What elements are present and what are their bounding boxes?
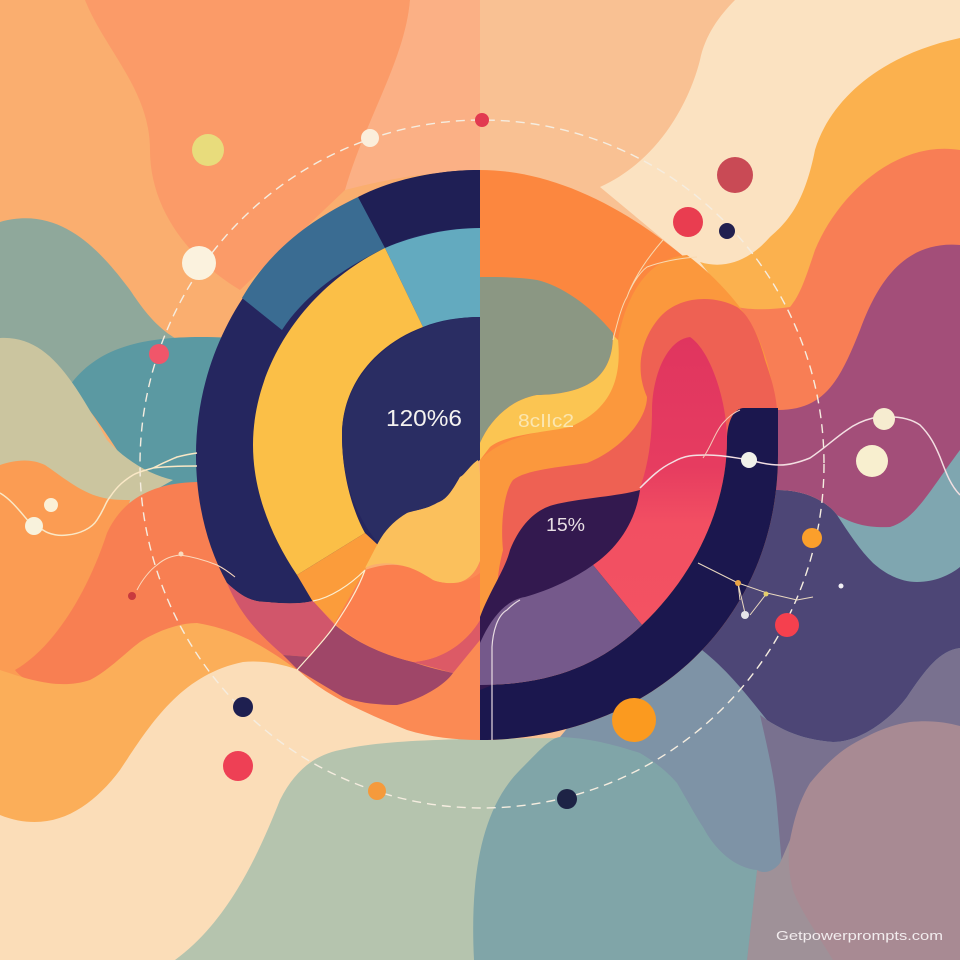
dot: left coral	[149, 344, 169, 364]
ring: coral swirl	[497, 299, 777, 620]
background: slate-blue right	[830, 440, 960, 640]
background: peach top centre	[345, 0, 480, 190]
connector: bottom line	[297, 570, 365, 670]
ring: dark navy arc	[480, 408, 778, 740]
label: small scale: 8cIIc2	[518, 411, 574, 431]
watermark: Getpowerprompts.com	[776, 928, 943, 943]
dot: bottom red	[223, 751, 253, 781]
label: 15%: 15%	[546, 515, 585, 535]
background: cream wave	[600, 0, 960, 300]
dot: navy lower left	[233, 697, 253, 717]
ring: lighter orange band	[480, 255, 778, 620]
label: 120%: 120%6	[386, 405, 462, 431]
dot: left cream pair 1	[44, 498, 58, 512]
ring: light blue segment	[385, 228, 480, 327]
dot: navy small	[719, 223, 735, 239]
connector: lower left line	[137, 555, 235, 590]
background: amber lower wave	[0, 623, 300, 825]
ring: lower yellow	[365, 460, 485, 583]
dot: amber node	[735, 580, 741, 586]
ring: crimson to rose segment	[593, 337, 727, 625]
background: coral wave	[737, 149, 960, 420]
connector: right branch	[703, 410, 740, 458]
background: amber wave	[700, 38, 960, 340]
dot: wavy cream top	[873, 408, 895, 430]
dot: bottom orange	[368, 782, 386, 800]
background: grey purple	[760, 648, 960, 960]
dot: yellow	[192, 134, 224, 166]
dot: ring white	[741, 452, 757, 468]
dot: tiny orbit	[838, 584, 844, 588]
connector: lower right line	[698, 563, 813, 615]
ring: grey-green segment	[480, 277, 613, 443]
dot: red right	[775, 613, 799, 637]
background: teal-grey wave	[0, 218, 215, 480]
dot: tiny white	[741, 611, 749, 619]
ring: yellow segment	[253, 248, 423, 575]
background: mauve blob	[789, 721, 960, 960]
background: teal lower blob	[473, 737, 757, 960]
connector: right wavy line	[640, 417, 960, 495]
connector: left wavy line	[0, 453, 197, 535]
connector: top right thin lines	[613, 240, 697, 340]
background: light mauve	[747, 830, 960, 960]
ring: left lower base	[227, 560, 480, 740]
ring: top navy	[358, 170, 480, 248]
dots: data points	[25, 113, 895, 809]
ring: lower orange wedge	[297, 533, 378, 623]
background: salmon wave	[85, 0, 410, 290]
dot: wavy cream large	[856, 445, 888, 477]
ring: violet segment	[480, 565, 642, 685]
ring: rose right band	[413, 620, 480, 673]
background: sage lower wave	[175, 738, 600, 960]
ring: left navy outer	[196, 170, 480, 603]
dot: bottom navy	[557, 789, 577, 809]
ring: dark centre	[480, 490, 642, 690]
dot: orange right	[802, 528, 822, 548]
ring: plum band	[283, 625, 453, 705]
ring: centre navy	[342, 317, 480, 543]
background: indigo wave	[640, 480, 960, 780]
background: left top orange	[0, 0, 480, 960]
dot: left cream pair 2	[25, 517, 43, 535]
dot: top red	[475, 113, 489, 127]
background: khaki wave	[0, 338, 173, 510]
connector: lower centre line	[492, 600, 520, 740]
dot: top cream	[361, 129, 379, 147]
background: orange left wave	[0, 460, 130, 690]
background: coral left wave	[15, 482, 340, 700]
dot: red	[673, 207, 703, 237]
chart: central segmented ring	[196, 170, 778, 740]
background: slate lower wave	[560, 640, 960, 960]
dot: large cream	[182, 246, 216, 280]
dot: amber node 2	[764, 592, 768, 596]
dot: small red left	[128, 592, 136, 600]
background: teal wave	[70, 337, 260, 490]
ring: lower orange swirl	[335, 565, 480, 662]
background: right top peach	[480, 0, 960, 960]
dot: crimson large	[717, 157, 753, 193]
dashed orbit ring	[140, 120, 824, 808]
ring: yellow swirl	[480, 335, 619, 460]
dot: tiny centre	[178, 552, 184, 556]
ring: blue segment	[242, 197, 385, 330]
ring: rose left band	[227, 583, 335, 657]
background: cream lower wave	[0, 662, 460, 960]
ring: right orange base	[480, 170, 778, 740]
dot: large orange	[612, 698, 656, 742]
background: plum wave	[770, 245, 960, 527]
